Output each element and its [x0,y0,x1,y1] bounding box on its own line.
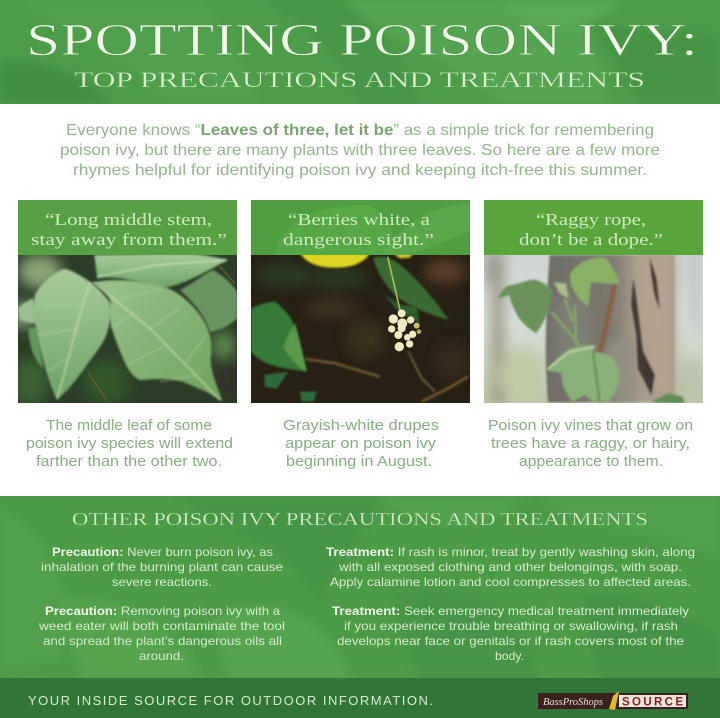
quote band: “Raggy rope, [536,210,646,229]
quote band: stay away from them.” [31,230,227,249]
treatment: minor rash [326,545,695,589]
footer tagline: YOUR INSIDE SOURCE FOR OUTDOOR INFORMATION. [28,693,433,708]
intro text: Everyone knows “ Leaves of three, let it be ” as a simple trick for remembering [66,122,654,139]
logo: Bass Pro Shops 1 Source [538,691,688,710]
treatment: emergency: if you experience trouble breathing or swallowing, if rash [344,619,678,633]
precaution: burning: severe reactions. [112,575,212,589]
treatment: emergency: develops near face or genitals or if rash covers most of the [337,634,684,648]
treatment: emergency: body. [495,649,524,663]
caption: poison ivy species will extend [26,436,233,452]
treatment: minor rash: with all exposed clothing and other belongings, with soap. [338,560,682,574]
logo: Bass Pro Shops 1 Source: SOURCE [622,696,683,708]
precaution: burning: Precaution: Never burn poison ivy, as [52,545,273,559]
caption: appear on poison ivy [285,436,437,452]
precaution: burning: inhalation of the burning plant can cause [41,560,283,574]
panel: long middle stem [12,200,240,470]
caption: Grayish-white drupes [283,418,439,434]
title: SPOTTING POISON IVY: [26,15,698,65]
precaution: weed eater [38,604,285,663]
quote band [251,200,470,255]
treatment: minor rash: Treatment: If rash is minor, treat by gently washing skin, along [326,545,695,559]
quote band [18,200,237,255]
panel: berries white [251,200,470,470]
photo: vine on tree [484,255,703,403]
quote band: don’t be a dope.” [519,230,663,249]
quote band: dangerous sight.” [283,230,434,249]
caption: trees have a raggy, or hairy, [491,436,690,452]
caption: The middle leaf of some [46,418,212,434]
caption [26,418,233,470]
footer band [0,678,720,718]
caption [283,418,439,470]
caption: appearance to them. [519,454,663,470]
caption [488,418,693,470]
section heading: OTHER POISON IVY PRECAUTIONS AND TREATMENTS [72,509,648,529]
quote band: “Long middle stem, [45,210,212,229]
quote band [484,200,703,255]
precaution: burning [41,545,283,589]
precaution: weed eater: Precaution: Removing poison ivy with a [45,604,280,618]
caption: beginning in August. [286,454,432,470]
photo: three-leaf poison ivy [18,255,237,403]
treatment: emergency [332,604,689,663]
logo: Bass Pro Shops 1 Source: BassProShops [543,696,603,708]
intro text: rhymes helpful for identifying poison ivy and keeping itch-free this summer. [73,162,647,179]
subtitle: TOP PRECAUTIONS AND TREATMENTS [74,67,645,92]
intro text: poison ivy, but there are many plants with three leaves. So here are a few more [60,142,660,159]
panel: raggy rope [483,200,705,470]
header banner [0,0,720,104]
precaution: weed eater: and spread the plant’s dangerous oils all [43,634,282,648]
precaution: weed eater: weed eater will both contaminate the tool [38,619,285,633]
photo: white drupes [251,255,470,403]
intro text [60,122,660,179]
treatment: minor rash: Apply calamine lotion and cool compresses to affected areas. [330,575,691,589]
panel: other precautions and treatments [0,496,720,680]
precaution: weed eater: around. [139,649,184,663]
caption: Poison ivy vines that grow on [488,418,693,434]
quote band: “Berries white, a [288,210,431,229]
treatment: emergency: Treatment: Seek emergency medical treatment immediately [332,604,689,618]
caption: farther than the other two. [36,454,222,470]
